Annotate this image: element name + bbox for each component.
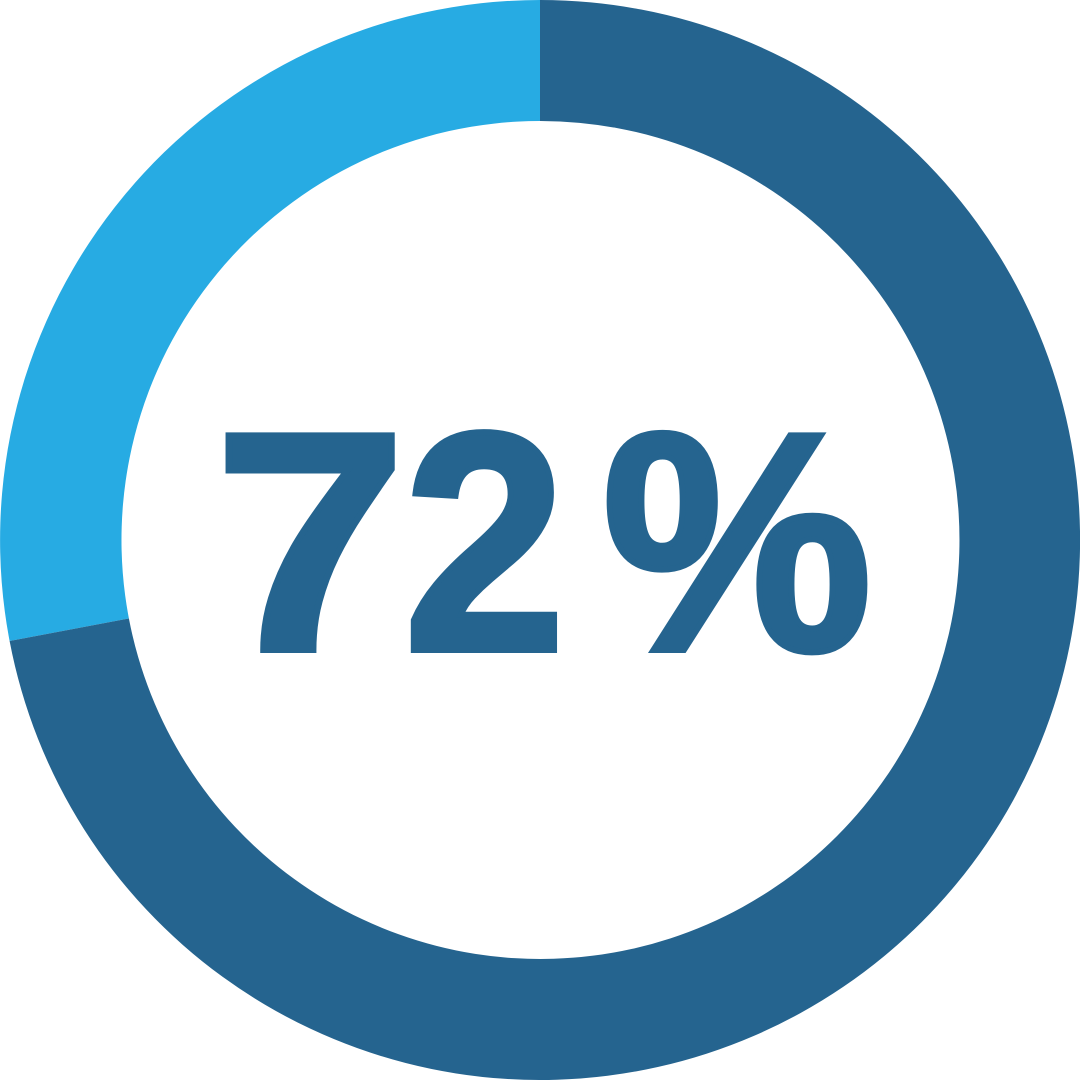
center value: 72%: % xyxy=(602,369,872,717)
segment: remaining 28% xyxy=(0,0,540,641)
center value: 72%: 2 xyxy=(404,368,566,717)
center value: 72%: 7 xyxy=(214,368,407,716)
center value: 72% xyxy=(214,368,872,717)
